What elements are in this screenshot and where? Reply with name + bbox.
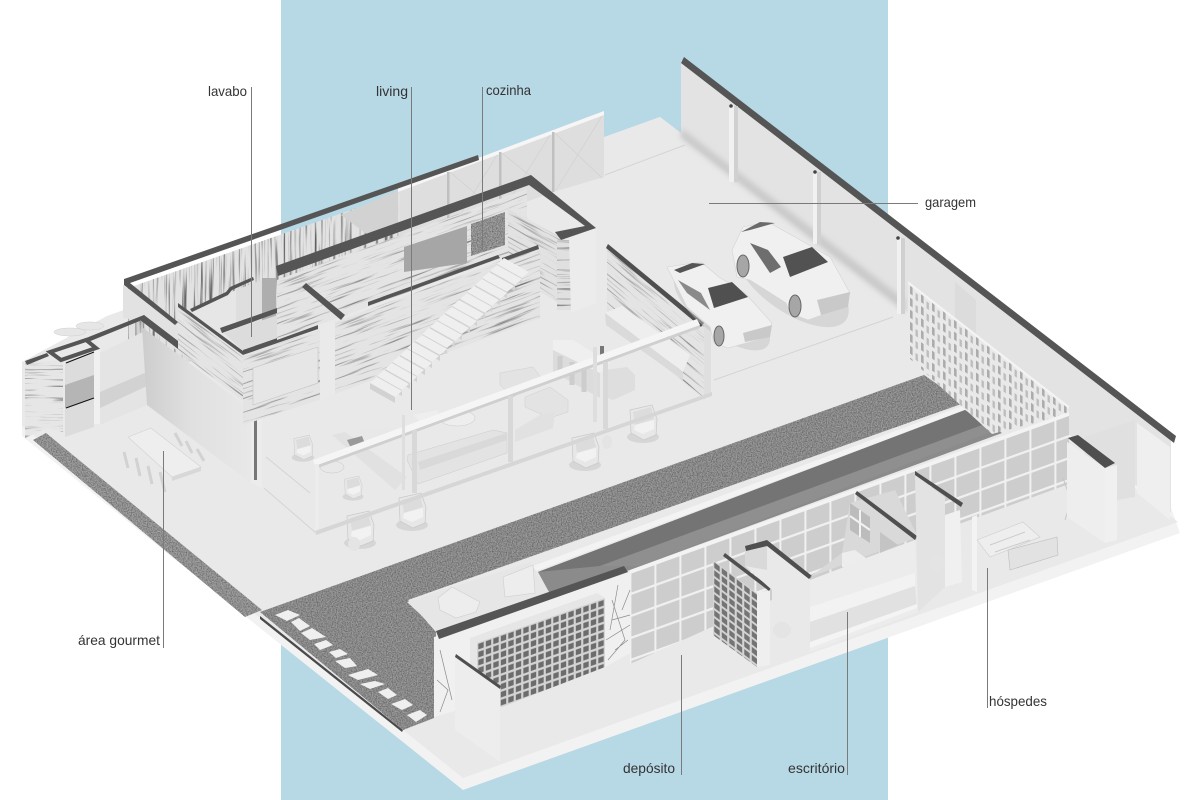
garage wood wall	[605, 244, 711, 400]
gravel garden strip	[260, 375, 964, 730]
guest room wall	[915, 471, 977, 612]
cars in garage	[662, 220, 863, 365]
label: cozinha: cozinha	[486, 82, 531, 98]
blue background band	[281, 0, 888, 800]
gourmet big wall	[140, 315, 262, 488]
car: front sedan	[662, 255, 782, 365]
guest room end block	[1067, 420, 1170, 543]
label: living: living	[376, 83, 408, 99]
office partition wall	[745, 540, 812, 650]
kitchen upper wall	[276, 175, 596, 340]
slab dark edge near gravel	[260, 616, 403, 732]
cobogo perforated wall	[908, 281, 1069, 434]
gourmet kitchen	[25, 315, 147, 438]
label: escritório: escritório	[788, 760, 845, 776]
depot shelf	[713, 553, 771, 667]
garage boundary wall	[681, 57, 1176, 512]
armchair group	[292, 405, 659, 551]
marble wall and large shelf	[434, 566, 630, 717]
label: hóspedes: hóspedes	[989, 693, 1047, 709]
paneled long wall	[630, 412, 1069, 664]
office desk shelving	[810, 490, 918, 652]
guest bed	[977, 478, 1078, 570]
label: área gourmet: área gourmet	[78, 632, 160, 648]
pool channel	[533, 405, 1002, 594]
lavabo rooms	[178, 277, 335, 425]
chair platform	[407, 562, 549, 630]
leader lines	[164, 87, 988, 775]
entry wall	[455, 654, 501, 762]
glazed living frame	[313, 319, 712, 535]
staircase	[370, 258, 529, 403]
label: garagem: garagem	[925, 194, 976, 210]
side gravel strip	[33, 433, 262, 617]
gourmet dining table	[124, 428, 204, 492]
car: rear SUV	[721, 220, 863, 344]
back gate panels	[398, 111, 604, 250]
stepping stones	[275, 610, 427, 722]
staircase wall	[302, 245, 540, 394]
living room furniture	[320, 367, 568, 490]
kitchen island	[553, 340, 635, 400]
label: depósito: depósito	[623, 760, 675, 776]
board-formed back wall	[123, 155, 479, 383]
label: lavabo: lavabo	[208, 83, 247, 99]
